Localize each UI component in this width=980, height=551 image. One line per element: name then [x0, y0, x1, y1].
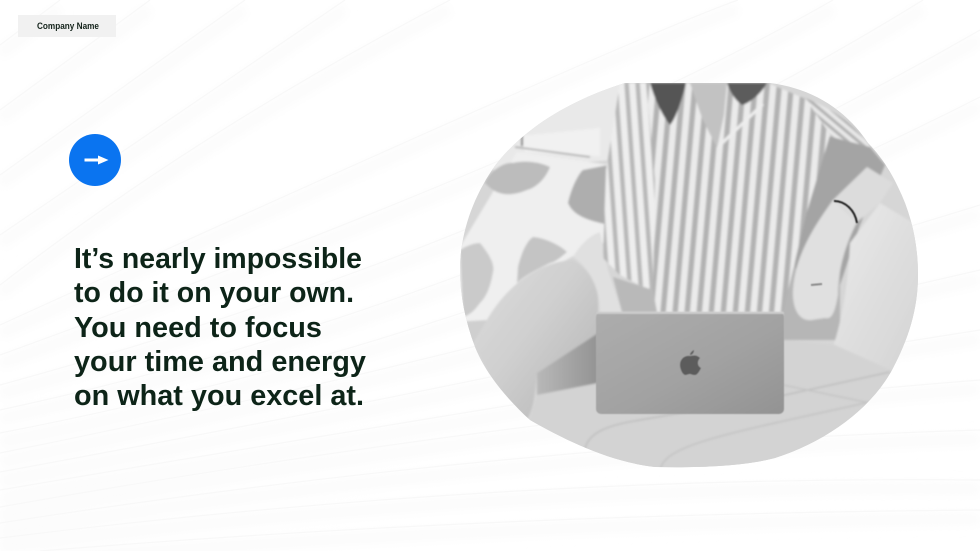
shirt sleeve right	[805, 98, 870, 147]
bracelet	[834, 201, 857, 223]
forearm	[832, 166, 882, 222]
headline: to do it on your own.	[74, 277, 354, 309]
infographic slide	[18, 15, 918, 468]
hair left	[650, 83, 686, 125]
inner forearm	[613, 277, 657, 312]
headline: on what you excel at.	[74, 380, 364, 412]
shorts ruffle	[576, 233, 620, 311]
shirt sleeve left	[603, 83, 655, 292]
headline: You need to focus	[74, 312, 322, 344]
headline	[74, 243, 366, 412]
company name tag	[18, 15, 116, 37]
arm gap	[783, 135, 885, 340]
icon: blue arrow circle	[69, 134, 121, 186]
hair right	[727, 83, 767, 105]
leaf: pillow right	[568, 165, 608, 225]
leaf: pillow flower	[517, 237, 567, 283]
leaf: pillow top	[485, 162, 550, 194]
thigh	[486, 261, 598, 418]
hand	[793, 200, 857, 320]
neck	[690, 83, 727, 148]
room background	[492, 85, 620, 170]
room strip under pillow	[467, 320, 486, 342]
collar line	[722, 104, 764, 144]
apple logo	[680, 350, 701, 375]
sofa seat	[530, 340, 895, 470]
laptop	[596, 312, 784, 414]
company name text: Company Name	[37, 21, 99, 31]
headline: your time and energy	[74, 346, 366, 378]
pillow	[460, 162, 606, 322]
shirt body	[628, 83, 830, 312]
photo: woman with laptop on sofa	[455, 80, 925, 472]
ring	[811, 284, 822, 285]
headline: It’s nearly impossible	[74, 243, 362, 275]
calf	[537, 333, 598, 395]
right sofa cushion	[834, 204, 916, 366]
leaf: pillow lower left	[460, 243, 493, 317]
